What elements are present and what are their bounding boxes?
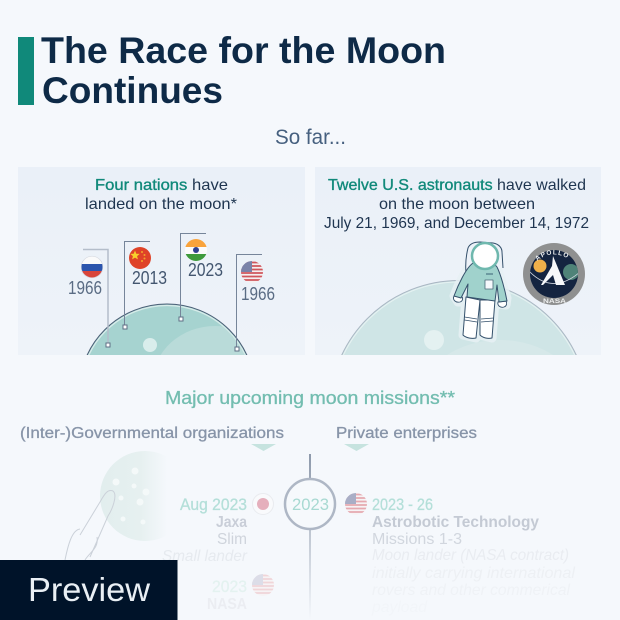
- mission: NASA 2023: 2023: [212, 578, 247, 596]
- flag: China: [129, 247, 151, 269]
- panel heading: four nations: Four nations have: [95, 177, 228, 194]
- mission: Astrobotic: initially carrying international: [372, 565, 575, 582]
- year marker: 2023: 2023: [292, 495, 329, 514]
- flag: India: [185, 239, 207, 262]
- year labels: [68, 260, 275, 304]
- flag: USA faded: [252, 574, 274, 596]
- moon: [341, 280, 577, 355]
- year labels: 1966: [68, 278, 102, 298]
- mission: Astrobotic: Moon lander (NASA contract): [372, 547, 569, 564]
- suit: [454, 260, 507, 302]
- backpack: [466, 242, 503, 273]
- mission: NASA 2023: NASA: [207, 596, 247, 613]
- year labels: 2023: [188, 260, 223, 280]
- title: The Race for the Moon: [41, 30, 446, 71]
- astronaut: [453, 242, 507, 338]
- marker: governmental: [251, 444, 276, 451]
- mission: Jaxa Slim: Jaxa: [216, 514, 247, 531]
- mission: Jaxa Slim: Aug 2023: [180, 496, 247, 514]
- panel heading: astronauts: Twelve U.S. astronauts have walked: [328, 177, 586, 194]
- legs: [463, 297, 480, 338]
- mission: Astrobotic: Missions 1-3: [372, 531, 462, 548]
- mission: Astrobotic: [371, 496, 575, 616]
- letter A: [541, 256, 565, 285]
- panel heading: astronauts: [324, 177, 589, 232]
- mission: Jaxa Slim: [162, 496, 248, 565]
- flag pole: USA: [235, 254, 262, 351]
- column heading: governmental: (Inter-)Governmental organizations: [20, 425, 284, 442]
- mission: Astrobotic: 2023 - 26: [372, 496, 433, 514]
- mission: Astrobotic: payload: [371, 599, 428, 616]
- flag pole: China: [123, 242, 150, 329]
- year marker: 2023: [285, 479, 335, 529]
- preview badge: Preview: [28, 571, 150, 608]
- panel heading: astronauts: on the moon between: [379, 196, 535, 213]
- flag: USA private: [345, 493, 367, 515]
- illustration: faint moon and rocket: [65, 451, 190, 560]
- panel heading: four nations: landed on the moon*: [85, 196, 237, 213]
- Apollo badge: APOLLO: [536, 250, 568, 261]
- subtitle: So far...: [275, 126, 346, 149]
- mission: Jaxa Slim: Small lander: [162, 548, 248, 565]
- title: [41, 30, 446, 111]
- panel: twelve astronauts: [315, 167, 601, 355]
- year labels: 2013: [132, 268, 167, 288]
- title: Continues: [42, 70, 223, 111]
- panel: four nations: [18, 167, 305, 355]
- panel heading: four nations: [85, 177, 237, 213]
- section heading: upcoming missions: Major upcoming moon missions**: [165, 388, 455, 408]
- title accent bar: [18, 37, 34, 105]
- panel heading: astronauts: July 21, 1969, and December 14, 1972: [324, 215, 589, 232]
- flag pole: India: [179, 234, 206, 321]
- timeline axis: [309, 454, 311, 620]
- year labels: 1966: [241, 284, 275, 304]
- preview badge: [0, 560, 178, 620]
- mission: Astrobotic: Astrobotic Technology: [372, 514, 539, 531]
- mission: Jaxa Slim: Slim: [217, 531, 247, 548]
- Apollo badge: NASA: [543, 299, 567, 305]
- flag: Russia: [81, 256, 103, 279]
- flag: USA: [241, 261, 263, 283]
- halo: [454, 263, 507, 338]
- helmet: [472, 243, 498, 269]
- marker: private: [344, 444, 369, 451]
- flag pole: Russia: [83, 250, 110, 347]
- mission: NASA 2023: [207, 578, 247, 613]
- hands: [453, 296, 463, 302]
- mission: Astrobotic: rovers and other commerical: [372, 582, 570, 599]
- Apollo badge: [523, 243, 585, 305]
- moon: [86, 304, 248, 355]
- chest pack: [485, 280, 493, 289]
- flag: Japan: [252, 494, 274, 514]
- column heading: private: Private enterprises: [336, 425, 477, 442]
